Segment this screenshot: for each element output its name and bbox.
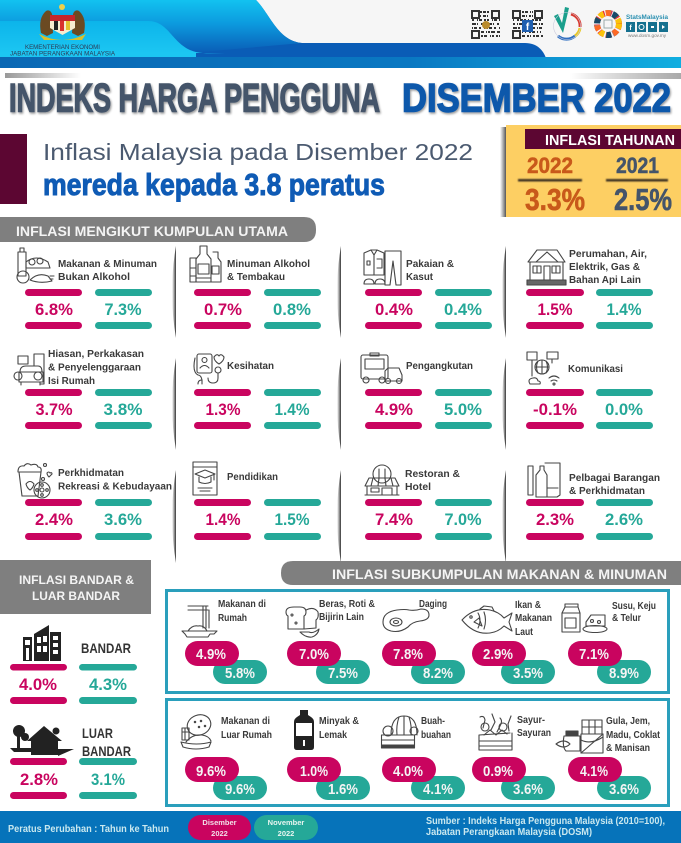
panel: clothing and footwear: Pakaian & — [406, 258, 454, 270]
panel: communication: Komunikasi — [568, 363, 623, 375]
panel: rural: LUAR — [82, 725, 113, 741]
StatsMalaysia social links: f — [629, 25, 632, 32]
item: food at home: 5.8% — [225, 665, 255, 682]
panel: recreation and culture: 2.4% — [35, 511, 73, 529]
item: fruits: buahan — [421, 730, 451, 741]
item: sugar, jam, honey, chocolate and confectionery: 4.1% — [580, 763, 608, 780]
panel: food and non-alcoholic beverages: 6.8% — [35, 301, 73, 319]
item: sugar, jam, honey, chocolate and confectionery: Madu, Coklat — [606, 730, 661, 741]
item: oils and fats — [287, 710, 370, 800]
icon: restaurant — [365, 465, 399, 495]
panel: communication: 0.0% — [605, 401, 643, 419]
panel: restaurants and hotels: 7.4% — [375, 511, 413, 529]
panel: transport: 5.0% — [444, 401, 482, 419]
item: fish and seafood: Ikan & — [515, 600, 541, 611]
item: rice, bread and cereals: Bijirin Lain — [319, 612, 364, 623]
panel: subgroup frame bottom — [166, 700, 668, 806]
item: fruits: 4.0% — [393, 763, 423, 780]
panel: annual inflation: 2022 — [527, 153, 573, 178]
item: meat — [382, 599, 465, 684]
item: rice, bread and cereals — [286, 599, 375, 684]
item: vegetables: 3.6% — [513, 781, 543, 798]
panel: furnishings and household maintenance: 3.8% — [104, 401, 143, 419]
QR code 2 — [513, 11, 543, 38]
panel: clothing and footwear: 0.4% — [375, 301, 413, 319]
item: fruits: Buah- — [421, 716, 445, 727]
item: milk, cheese and eggs: 8.9% — [609, 665, 639, 682]
panel: housing, water, electricity, gas: Bahan Api Lain — [569, 274, 641, 286]
panel: housing, water, electricity, gas: 1.4% — [606, 301, 642, 319]
icon: vegetable crate — [479, 714, 512, 750]
panel: transport — [361, 353, 492, 429]
logo: SDG wheel — [597, 13, 619, 35]
item: milk, cheese and eggs: & Telur — [612, 613, 641, 624]
legend: November 2022: November — [268, 818, 304, 827]
item: food away from home: 9.6% — [196, 763, 226, 780]
icon: graduation book — [193, 462, 217, 495]
panel: miscellaneous goods and services: Pelbagai Barangan — [569, 472, 660, 484]
section heading: main groups — [0, 217, 316, 242]
panel: annual inflation — [500, 125, 681, 217]
source: Sumber : Indeks Harga Pengguna Malaysia (2010=100), — [426, 816, 665, 827]
icon: fruit crate — [382, 716, 418, 748]
icon: bus and car — [361, 353, 402, 384]
panel: miscellaneous goods and services — [526, 463, 660, 540]
panel: rural — [10, 725, 137, 799]
panel: housing, water, electricity, gas — [526, 248, 653, 329]
panel: alcoholic beverages and tobacco: & Tembakau — [227, 271, 285, 283]
panel: communication — [526, 352, 653, 429]
item: vegetables: Sayuran — [517, 728, 551, 739]
item: sugar, jam, honey, chocolate and confectionery: & Manisan — [606, 743, 650, 754]
headline accent block — [0, 134, 27, 204]
headline: Inflasi Malaysia pada Disember 2022 — [43, 139, 473, 165]
icon: groceries — [17, 248, 54, 283]
item: sugar, jam, honey, chocolate and confectionery — [556, 716, 661, 800]
logo: statistics mark — [554, 7, 580, 40]
item: food away from home: Makanan di — [221, 716, 270, 727]
item: vegetables — [472, 714, 555, 800]
icon: noodles bowl — [182, 606, 217, 637]
panel: alcoholic beverages and tobacco: Minuman Alkohol — [227, 258, 310, 270]
item: food at home: Makanan di — [218, 599, 266, 610]
icon: medical phone and stethoscope — [194, 354, 224, 384]
item: oils and fats: 1.6% — [328, 781, 358, 798]
panel: health — [194, 354, 321, 429]
headline — [43, 139, 473, 202]
panel: restaurants and hotels: 7.0% — [444, 511, 482, 529]
panel: urban and rural heading — [0, 560, 151, 614]
panel: furnishings and household maintenance: 3.7% — [36, 401, 73, 419]
item: oils and fats: Lemak — [319, 730, 347, 741]
item: meat: 8.2% — [423, 665, 453, 682]
icon: oil bottle — [294, 710, 314, 750]
icon: popcorn and film — [18, 464, 52, 498]
item: food at home: 4.9% — [196, 646, 226, 663]
panel: furnishings and household maintenance — [14, 348, 152, 429]
panel: food and non-alcoholic beverages — [17, 248, 157, 329]
item: meat: 7.8% — [393, 646, 423, 663]
item: food at home — [182, 599, 267, 684]
source: Jabatan Perangkaan Malaysia (DOSM) — [426, 827, 592, 838]
logo: coat of arms — [39, 4, 86, 40]
StatsMalaysia social links — [626, 14, 668, 38]
item: fruits: 4.1% — [423, 781, 453, 798]
panel: urban and rural heading: LUAR BANDAR — [32, 589, 120, 603]
panel: housing, water, electricity, gas: 1.5% — [538, 301, 573, 319]
panel: annual inflation: 2021 — [616, 153, 659, 178]
panel: alcoholic beverages and tobacco — [190, 246, 321, 329]
item: sugar, jam, honey, chocolate and confectionery: Gula, Jem, — [606, 716, 650, 727]
panel: miscellaneous goods and services: 2.3% — [536, 511, 574, 529]
footer note: Peratus Perubahan : Tahun ke Tahun — [8, 824, 169, 835]
panel: alcoholic beverages and tobacco: 0.8% — [273, 301, 311, 319]
icon: burger and fries — [181, 711, 214, 749]
icon: living room — [14, 354, 44, 385]
StatsMalaysia social links: www.dosm.gov.my — [628, 33, 667, 38]
icon: city buildings — [23, 625, 61, 661]
section heading: main groups: INFLASI MENGIKUT KUMPULAN UTAMA — [16, 223, 288, 239]
icon: milk and cheese — [562, 604, 607, 632]
footer — [0, 811, 681, 843]
panel: urban: 4.0% — [19, 676, 57, 694]
panel: annual inflation: INFLASI TAHUNAN — [545, 132, 675, 149]
item: vegetables: 0.9% — [483, 763, 513, 780]
panel: education: Pendidikan — [227, 471, 278, 483]
panel: recreation and culture: 3.6% — [104, 511, 142, 529]
title: INDEKS HARGA PENGGUNA — [9, 76, 380, 120]
icon: rural house and trees — [10, 725, 74, 756]
ministry name: JABATAN PERANGKAAN MALAYSIA — [10, 50, 116, 58]
source — [426, 816, 665, 838]
panel: urban and rural heading: INFLASI BANDAR & — [19, 573, 134, 587]
legend: November 2022: 2022 — [278, 829, 294, 838]
panel: health: Kesihatan — [227, 360, 274, 372]
panel: education: 1.4% — [206, 511, 241, 529]
panel: miscellaneous goods and services: & Perkhidmatan — [569, 485, 645, 497]
legend: November 2022 — [254, 815, 318, 840]
panel: food and non-alcoholic beverages: 7.3% — [104, 301, 142, 319]
icon: bread — [286, 607, 319, 637]
ministry name — [10, 44, 116, 58]
panel: transport: 4.9% — [375, 401, 413, 419]
item: milk, cheese and eggs — [562, 601, 656, 684]
panel: housing, water, electricity, gas: Elektrik, Gas & — [569, 261, 640, 273]
section heading: food subgroups: INFLASI SUBKUMPULAN MAKANAN & MINUMAN — [332, 566, 667, 582]
item: milk, cheese and eggs: 7.1% — [579, 646, 609, 663]
item: fish and seafood: Laut — [515, 627, 534, 638]
panel: furnishings and household maintenance: Isi Rumah — [48, 375, 95, 387]
legend: December 2022: Disember — [202, 818, 237, 827]
header banner — [0, 0, 681, 68]
icon: house — [527, 250, 566, 285]
panel: furnishings and household maintenance: Hiasan, Perkakasan — [48, 348, 144, 360]
panel: housing, water, electricity, gas: Perumahan, Air, — [569, 248, 647, 260]
item: vegetables: Sayur- — [517, 715, 545, 726]
panel: clothing and footwear: Kasut — [406, 271, 433, 283]
item: fish and seafood — [462, 600, 555, 684]
item: sugar, jam, honey, chocolate and confectionery: 3.6% — [609, 781, 639, 798]
item: milk, cheese and eggs: Susu, Keju — [612, 601, 656, 612]
icon: bottles — [190, 246, 221, 282]
QR code 1 — [472, 11, 500, 38]
icon: steak — [383, 609, 429, 632]
panel: recreation and culture: Rekreasi & Kebudayaan — [58, 480, 172, 492]
item: oils and fats: Minyak & — [319, 716, 359, 727]
panel: health: 1.4% — [274, 401, 310, 419]
panel: recreation and culture — [18, 464, 172, 540]
panel: recreation and culture: Perkhidmatan — [58, 467, 124, 479]
ministry name: KEMENTERIAN EKONOMI — [25, 44, 100, 51]
item: fruits — [382, 716, 465, 800]
panel: alcoholic beverages and tobacco: 0.7% — [204, 301, 242, 319]
panel: urban — [10, 625, 137, 704]
icon: sweets — [556, 720, 603, 753]
QR code 2: f — [526, 22, 530, 33]
panel: urban: 4.3% — [89, 676, 127, 694]
item: food away from home: 9.6% — [225, 781, 255, 798]
panel: rural: 2.8% — [20, 771, 58, 789]
panel: health: 1.3% — [206, 401, 241, 419]
panel: rural: BANDAR — [82, 743, 131, 759]
panel: restaurants and hotels: Restoran & — [405, 468, 460, 480]
panel: urban: BANDAR — [81, 640, 131, 656]
icon: toiletries — [528, 463, 560, 497]
item: rice, bread and cereals: 7.5% — [328, 665, 358, 682]
item: food at home: Rumah — [218, 613, 247, 624]
item: food away from home: Luar Rumah — [221, 730, 272, 741]
panel: restaurants and hotels: Hotel — [405, 481, 431, 493]
StatsMalaysia social links: StatsMalaysia — [626, 14, 668, 21]
panel: furnishings and household maintenance: & Penyelenggaraan — [48, 362, 141, 374]
panel: miscellaneous goods and services: 2.6% — [605, 511, 643, 529]
panel: restaurants and hotels — [365, 465, 492, 540]
section heading: food subgroups — [281, 561, 681, 585]
item: food away from home — [181, 711, 272, 800]
legend: December 2022 — [188, 815, 251, 840]
headline: mereda kepada 3.8 peratus — [43, 167, 385, 202]
item: fish and seafood: 3.5% — [513, 665, 543, 682]
panel: rural: 3.1% — [91, 771, 125, 789]
icon: clothes — [364, 250, 401, 285]
panel: communication: -0.1% — [533, 401, 577, 419]
panel: education — [193, 462, 321, 540]
panel: food and non-alcoholic beverages: Makanan & Minuman — [58, 258, 157, 270]
icon: network globe — [527, 352, 559, 385]
panel: subgroup frame top — [166, 590, 668, 692]
item: rice, bread and cereals: Beras, Roti & — [319, 599, 375, 610]
panel: clothing and footwear — [364, 250, 492, 329]
legend: December 2022: 2022 — [211, 829, 228, 838]
panel: clothing and footwear: 0.4% — [444, 301, 482, 319]
item: meat: Daging — [419, 599, 447, 610]
icon: fish — [462, 606, 512, 633]
item: fish and seafood: Makanan — [515, 613, 552, 624]
item: oils and fats: 1.0% — [300, 763, 328, 780]
panel: transport: Pengangkutan — [406, 360, 473, 372]
panel: food and non-alcoholic beverages: Bukan Alkohol — [58, 271, 130, 283]
panel: education: 1.5% — [274, 511, 310, 529]
item: fish and seafood: 2.9% — [483, 646, 513, 663]
panel: annual inflation: 3.3% — [525, 182, 585, 217]
item: rice, bread and cereals: 7.0% — [299, 646, 329, 663]
